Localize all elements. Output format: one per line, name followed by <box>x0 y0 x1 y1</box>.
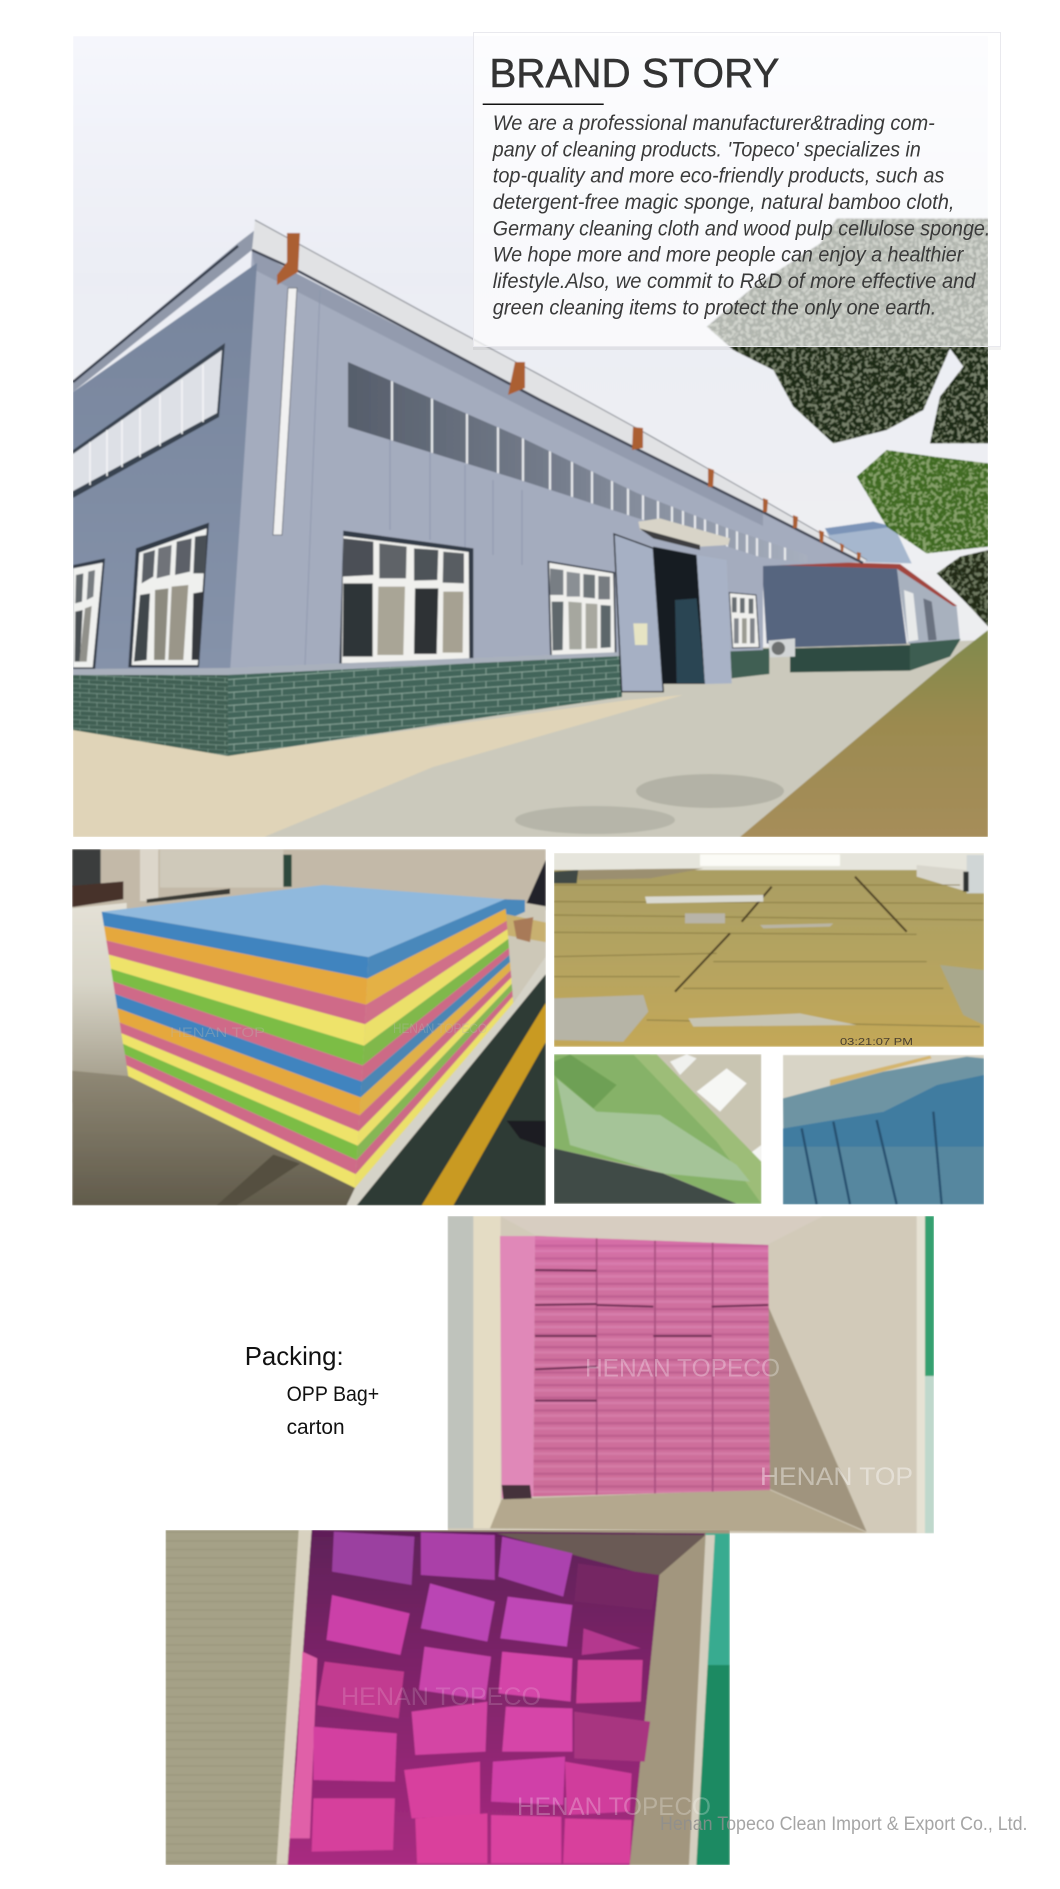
brick base <box>73 652 622 756</box>
photo: blue sponge packs <box>783 1055 984 1204</box>
heading: brand story: BRAND STORY <box>489 50 779 96</box>
photo: open carton with magenta sponges <box>166 1530 730 1865</box>
packing detail line 2: carton <box>287 1416 345 1439</box>
roof gutter <box>252 220 867 563</box>
text block: company description: We are a professional manufacturer&trading com- <box>493 111 935 135</box>
rust marks <box>277 233 861 560</box>
photo: factory building <box>73 36 988 837</box>
text block: company description: Germany cleaning cloth and wood pulp cellulose sponge. <box>493 216 990 240</box>
upper long windows <box>347 362 787 561</box>
ground <box>73 630 988 837</box>
sponge layers side face <box>355 899 513 1188</box>
watermark: sponge photo: HENAN TOP <box>170 1024 265 1040</box>
long wall <box>228 250 863 672</box>
left roof edge <box>73 230 255 392</box>
panel: brand story card <box>473 32 1001 350</box>
short wall <box>73 263 257 672</box>
watermark: carton two <box>341 1683 711 1821</box>
watermark: carton one: HENAN TOP <box>760 1463 913 1491</box>
ground-floor windows left <box>73 523 209 671</box>
doorway <box>614 518 732 692</box>
sponge top <box>102 885 505 957</box>
packing detail line 1: OPP Bag+ <box>287 1383 379 1406</box>
annex and distant tower <box>730 522 961 678</box>
text block: company description: top-quality and more eco-friendly products, such as <box>493 164 945 188</box>
text block: company description: lifestyle.Also, we commit to R&D of more effective and <box>493 269 976 293</box>
heading: packing: Packing: <box>245 1341 344 1371</box>
text block: company description: green cleaning items to protect the only one earth. <box>493 295 936 319</box>
watermark: company name: Henan Topeco Clean Import & Export Co., Ltd. <box>660 1814 1028 1835</box>
watermark: sponge photo: HENAN TOPECO <box>393 1020 487 1036</box>
ground-floor windows centre <box>339 531 473 666</box>
upper left windows <box>73 343 225 498</box>
text block: company description: pany of cleaning products. 'Topeco' specializes in <box>492 138 921 162</box>
watermark: carton one: HENAN TOPECO <box>585 1355 780 1383</box>
watermark: carton one <box>585 1355 913 1491</box>
text block: company description <box>492 111 990 319</box>
heading underline <box>483 104 604 105</box>
sponge layers front face <box>102 912 368 1188</box>
photo: green sponge packs <box>554 1054 761 1204</box>
watermark: sponge photo <box>170 1020 487 1040</box>
watermark: carton two: HENAN TOPECO <box>517 1793 711 1821</box>
ground-floor windows right <box>548 562 759 657</box>
text block: packing note <box>245 1341 379 1439</box>
text block: company description: detergent-free magic sponge, natural bamboo cloth, <box>493 190 954 214</box>
watermark: carton two: HENAN TOPECO <box>341 1683 541 1711</box>
drain pipe <box>273 288 297 535</box>
text block: company description: We hope more and more people can enjoy a healthier <box>493 243 964 267</box>
sponge packs <box>312 1532 659 1863</box>
photo: carton with pink sponges <box>448 1216 934 1533</box>
carton seams <box>554 885 983 1027</box>
timestamp: warehouse photo: 03:21:07 PM <box>840 1037 913 1048</box>
photo: cartons in warehouse <box>554 853 984 1047</box>
photo: rainbow sponge stack <box>72 849 546 1205</box>
trees <box>707 218 988 627</box>
